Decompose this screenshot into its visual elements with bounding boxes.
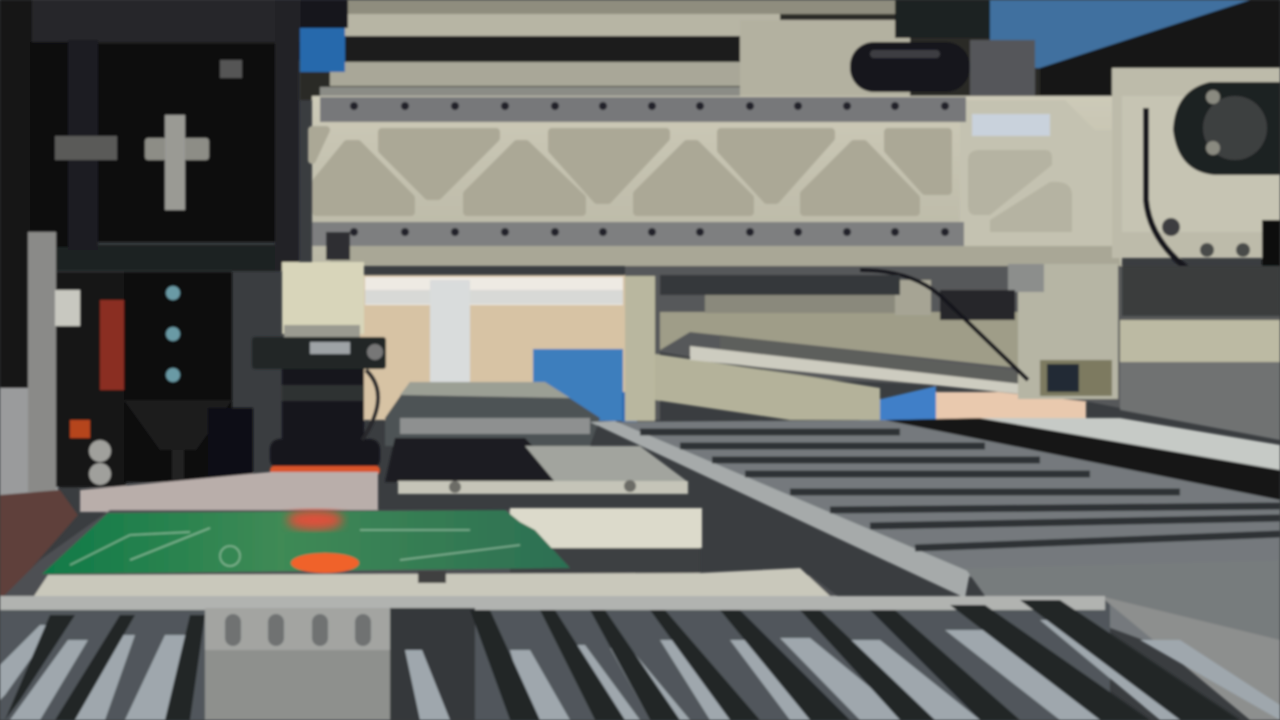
label sticker: [972, 114, 1050, 136]
beam cut-outs: [312, 130, 948, 212]
foreground feeders: [0, 596, 1280, 720]
printed circuit board: [42, 508, 702, 574]
gantry beam: [312, 87, 1122, 266]
rail screws: [350, 102, 949, 236]
camera assembly: [252, 262, 386, 475]
background: top machine housing: [300, 0, 1280, 100]
feeder tray: right side angled lanes: [590, 418, 1280, 690]
background: factory wall seen through machine: [345, 275, 1086, 422]
left column of placement head: [0, 232, 253, 498]
conveyor rail in front of board: [30, 568, 830, 602]
component tray: [385, 438, 688, 494]
cable duct and motor: [850, 40, 1035, 112]
black placement head frame: [0, 0, 350, 388]
right motor block: [1112, 68, 1280, 280]
top rail: [320, 97, 966, 122]
work table under head: [0, 472, 1000, 720]
right side machine frame under beam: [625, 264, 1280, 440]
bottom rail: [312, 222, 964, 246]
feeder rack behind: [385, 382, 600, 446]
